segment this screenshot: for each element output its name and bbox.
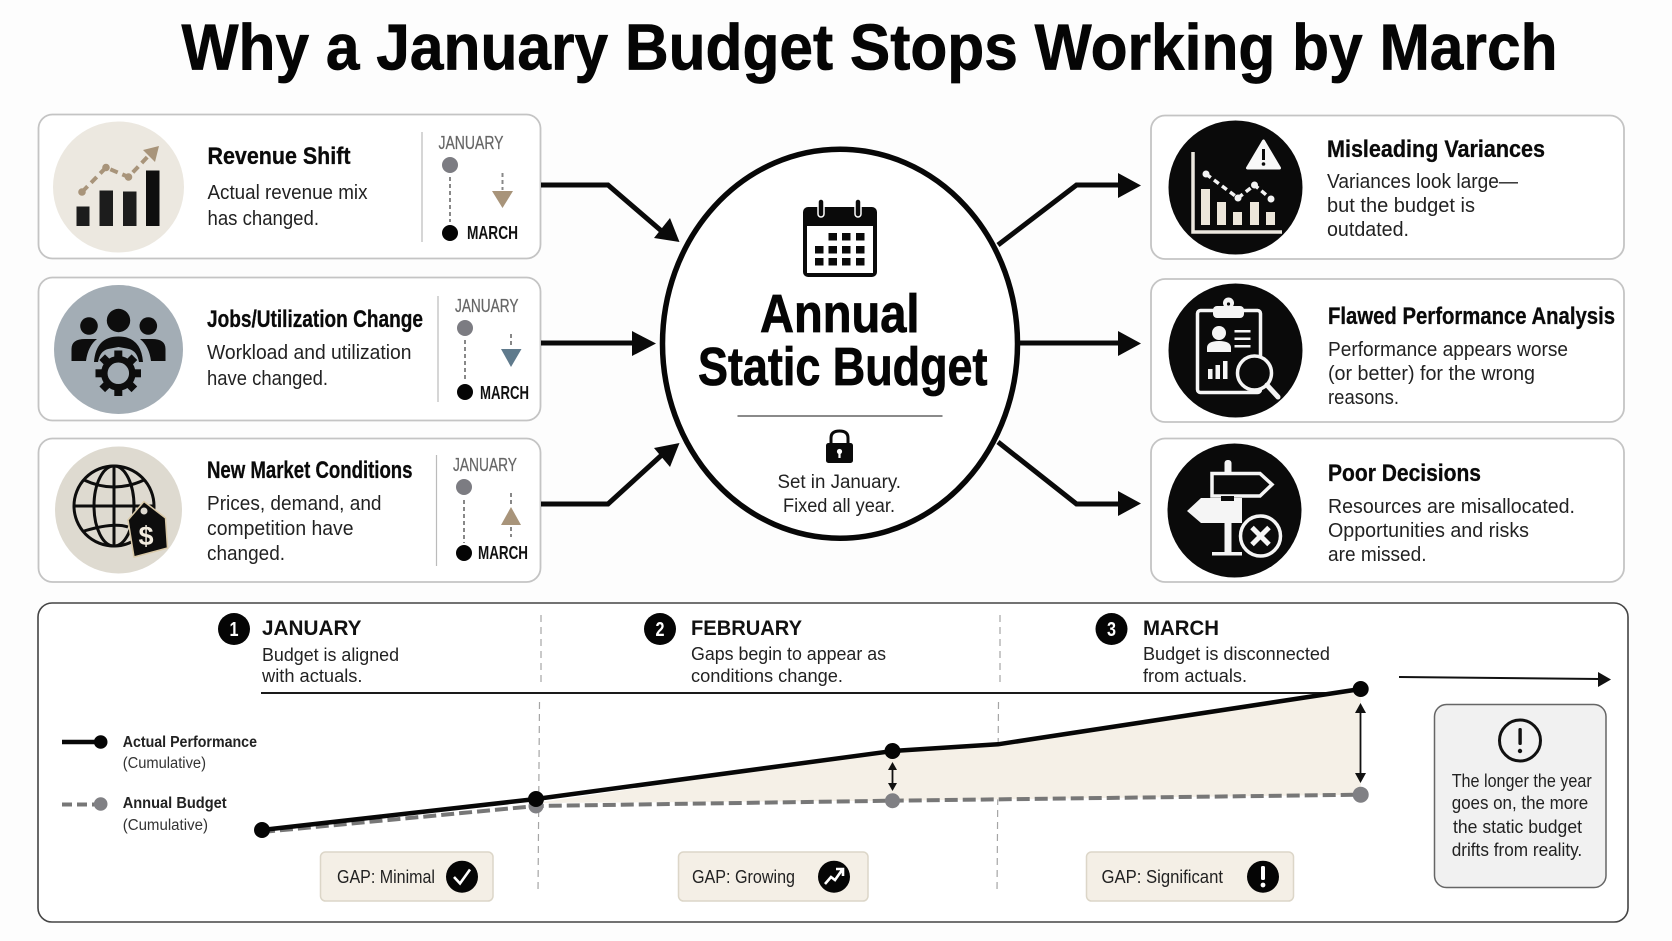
text: market description: changed. [207,543,285,565]
text: set in january [778,472,901,517]
arrow: march gap [1355,703,1366,783]
mini timeline: revenue shift: JANUARY [438,133,504,153]
panel: flawed performance analysis [1151,279,1624,422]
step: march: MARCH [1143,617,1219,640]
text: variances description [1327,171,1518,241]
title: Why a January Budget Stops Working by March [182,10,1558,84]
text: revenue shift description: has changed. [208,208,319,230]
legend [62,734,257,834]
text: poor decisions description: are missed. [1328,544,1426,566]
icon: people and gear [54,285,183,414]
text: jobs description: have changed. [207,368,328,390]
legend: Actual Performance [123,734,257,751]
mini timeline: revenue shift: MARCH [467,223,518,243]
text: market description [207,493,382,565]
text: market description: competition have [207,518,354,540]
badge: gap minimal [320,852,493,901]
text: revenue shift description [208,182,368,230]
mini timeline: market: JANUARY [453,455,517,475]
heading: annual static budget: Static Budget [698,337,988,397]
chart: actual versus budget gap [254,681,1369,838]
icon: globe and price tag [55,446,182,574]
heading: annual static budget [698,284,988,397]
text: set in january: Fixed all year. [783,496,895,517]
panel: jobs and utilization change [38,278,540,420]
central circle: annual static budget [662,149,1018,538]
arrow: revenue shift to budget [541,185,680,242]
heading: poor decisions: Poor Decisions [1328,460,1481,487]
icon: exclamation circle [1500,720,1540,761]
text: callout message: goes on, the more [1452,793,1588,813]
text: variances description: Variances look large— [1327,171,1518,193]
heading: jobs and utilization change: Jobs/Utilization Change [207,306,423,333]
text: revenue shift description: Actual revenue mix [208,182,368,204]
mini timeline: market: MARCH [478,543,528,563]
step: january: Budget is aligned [262,645,399,665]
legend: (Cumulative) [123,755,206,772]
text: poor decisions description: Resources are misallocated. [1328,496,1575,518]
legend: (Cumulative) [123,817,208,834]
mini timeline: market [436,455,528,566]
panel: misleading variances [1151,116,1624,259]
step: march: Budget is disconnected [1143,644,1330,664]
badge: gap significant [1086,852,1294,901]
text: market description: Prices, demand, and [207,493,382,515]
text: flawed analysis description: Performance appears worse [1328,339,1568,361]
arrow: market to budget [541,443,680,504]
panel: timeline [38,603,1628,922]
mini timeline: jobs [438,296,529,403]
text: callout message: the static budget [1453,817,1582,837]
step: january: with actuals. [261,666,362,686]
heading: new market conditions: New Market Conditions [207,457,412,484]
step: march: from actuals. [1143,666,1247,686]
text: variances description: outdated. [1327,219,1409,241]
step: march [1096,613,1330,686]
arrow: february gap [888,762,897,791]
badge: gap minimal: GAP: Minimal [337,867,435,887]
step: february [644,613,886,686]
text: callout message: The longer the year [1452,771,1592,791]
badge: gap growing [678,852,868,901]
panel: revenue shift [38,114,540,258]
text: jobs description [207,342,412,390]
text: poor decisions description [1328,496,1575,566]
step: february: 2 [656,619,664,641]
badge: gap growing: GAP: Growing [692,867,795,887]
icon: clipboard with magnifier [1168,284,1302,418]
text: poor decisions description: Opportunities and risks [1328,520,1529,542]
arrow: budget to poor decisions [998,442,1141,516]
step: january: 1 [230,619,238,641]
step: february: FEBRUARY [691,617,802,640]
mini timeline: revenue shift [422,132,518,243]
text: set in january: Set in January. [778,472,901,493]
icon: variance chart with warning [1168,120,1302,254]
text: variances description: but the budget is [1327,195,1475,217]
arrow: jobs to budget [541,331,656,356]
heading: annual static budget: Annual [760,284,920,344]
panel: poor decisions [1151,438,1624,582]
step: january [218,613,399,686]
mini timeline: jobs: MARCH [480,383,529,403]
icon: calendar [803,199,877,277]
text: flawed analysis description: (or better) for the wrong [1328,363,1535,385]
text: callout message: drifts from reality. [1452,840,1582,860]
arrow: budget to misleading variances [998,173,1141,245]
mini timeline: jobs: JANUARY [455,296,518,316]
badge: gap significant: GAP: Significant [1102,867,1223,887]
step: february: Gaps begin to appear as [691,644,886,664]
text: jobs description: Workload and utilization [207,342,412,364]
text: flawed analysis description [1328,339,1568,409]
callout: drift from reality [1434,704,1606,888]
icon: globe and price tag: $ [138,521,154,551]
arrow: time continues [1399,672,1611,687]
step: february: conditions change. [691,666,843,686]
text: flawed analysis description: reasons. [1328,387,1399,409]
text: callout message [1452,771,1592,860]
icon: revenue bars and trend [53,122,184,252]
icon: signpost with cross [1168,444,1302,578]
arrow: budget to flawed analysis [1020,331,1141,356]
step: january: JANUARY [262,617,362,640]
legend: Annual Budget [123,795,227,812]
step: march: 3 [1107,619,1116,641]
icon: padlock [826,431,853,463]
heading: misleading variances: Misleading Variances [1327,136,1545,163]
heading: flawed performance analysis: Flawed Performance Analysis [1328,303,1615,330]
heading: revenue shift: Revenue Shift [208,143,351,170]
panel: new market conditions [38,438,540,582]
